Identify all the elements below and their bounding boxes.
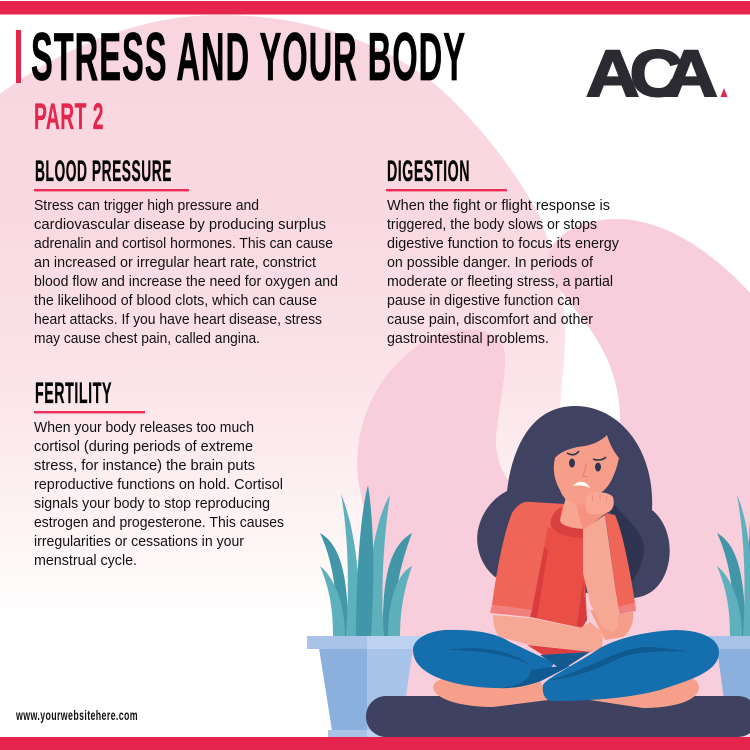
text block: digestion: When the fight or flight response is — [387, 198, 610, 214]
text block: blood pressure: the likelihood of blood clots, which can cause — [34, 293, 317, 309]
cushion — [366, 696, 750, 737]
left cuff — [490, 605, 532, 617]
text block: digestion: on possible danger. In periods of — [387, 255, 594, 271]
left leg shading — [497, 666, 570, 688]
text block: blood pressure: heart attacks. If you have heart disease, stress — [34, 312, 322, 328]
text block: fertility: reproductive functions on hold. Cortisol — [34, 477, 283, 493]
woman — [413, 406, 719, 708]
upper arm right — [590, 610, 633, 640]
text block: fertility: cortisol (during periods of extreme — [34, 439, 253, 455]
text block: digestion — [387, 198, 620, 347]
underline — [34, 189, 189, 191]
background blob: lower pink — [357, 330, 640, 737]
text block: blood pressure: Stress can trigger high pressure and — [34, 198, 259, 214]
left foot — [433, 678, 548, 707]
section: blood pressure: BLOOD PRESSURE — [35, 155, 172, 188]
section: digestion — [386, 155, 620, 347]
top red band — [0, 1, 750, 14]
title bar accent — [16, 30, 21, 83]
text block: blood pressure: blood flow and increase the need for oxygen and — [34, 274, 338, 290]
text block: digestion: digestive function to focus its energy — [387, 236, 620, 252]
section: blood pressure — [34, 155, 338, 347]
text block: fertility: estrogen and progesterone. This causes — [34, 515, 284, 531]
text block: fertility: stress, for instance) the brain puts — [34, 458, 255, 474]
right plant — [717, 495, 750, 636]
face — [554, 435, 619, 504]
text block: fertility: When your body releases too much — [34, 420, 254, 436]
neck shadow — [575, 495, 606, 531]
text block: blood pressure: adrenalin and cortisol hormones. This can cause — [34, 236, 333, 252]
text block: blood pressure: an increased or irregular heart rate, constrict — [34, 255, 316, 271]
text block: blood pressure: cardiovascular disease by producing surplus — [34, 217, 326, 233]
logo: ACA — [586, 37, 718, 110]
leg crease — [548, 647, 688, 680]
right pot — [708, 636, 750, 700]
right leg — [543, 630, 719, 701]
left sleeve — [492, 502, 549, 610]
background blob: right pink — [548, 219, 750, 737]
mouth — [573, 482, 590, 488]
forearm raised — [583, 515, 618, 633]
underline — [386, 189, 507, 191]
crotch — [540, 652, 590, 670]
hair — [477, 406, 670, 598]
right sleeve — [605, 513, 635, 607]
left pot — [307, 636, 423, 737]
left leg — [413, 630, 553, 688]
text block: fertility — [34, 420, 284, 569]
text block: blood pressure: may cause chest pain, called angina. — [34, 331, 260, 347]
hair shadow — [607, 495, 644, 582]
section: digestion: DIGESTION — [387, 155, 470, 188]
text block: digestion: triggered, the body slows or stops — [387, 217, 597, 233]
text block: blood pressure — [34, 198, 338, 347]
shirt body — [530, 527, 587, 628]
neck — [560, 490, 606, 531]
text block: fertility: irregularities or cessations in your — [34, 534, 244, 550]
left leg crease — [447, 648, 530, 665]
text block: digestion: pause in digestive function can — [387, 293, 580, 309]
right foot — [590, 677, 699, 708]
shirt hem — [527, 645, 593, 655]
website url: www.yourwebsitehere.com — [15, 707, 138, 723]
left plant — [320, 485, 412, 636]
text block: fertility: signals your body to stop reproducing — [34, 496, 270, 512]
section: fertility: FERTILITY — [35, 377, 112, 410]
collar — [551, 507, 583, 538]
background blob: large pale pink — [0, 15, 565, 680]
bottom red band — [0, 737, 750, 750]
text block: digestion: cause pain, discomfort and other — [387, 312, 593, 328]
right cuff — [618, 603, 636, 614]
section: fertility — [34, 377, 284, 569]
subtitle: PART 2 — [34, 96, 104, 137]
forearm across — [493, 615, 603, 652]
text block: fertility: menstrual cycle. — [34, 553, 137, 569]
underline — [34, 411, 145, 413]
fist under chin — [585, 492, 614, 515]
shirt upper — [530, 502, 584, 540]
text block: digestion: moderate or fleeting stress, a partial — [387, 274, 613, 290]
shirt fold — [530, 547, 587, 628]
eyes and brows — [567, 451, 606, 477]
text block: digestion: gastrointestinal problems. — [387, 331, 549, 347]
